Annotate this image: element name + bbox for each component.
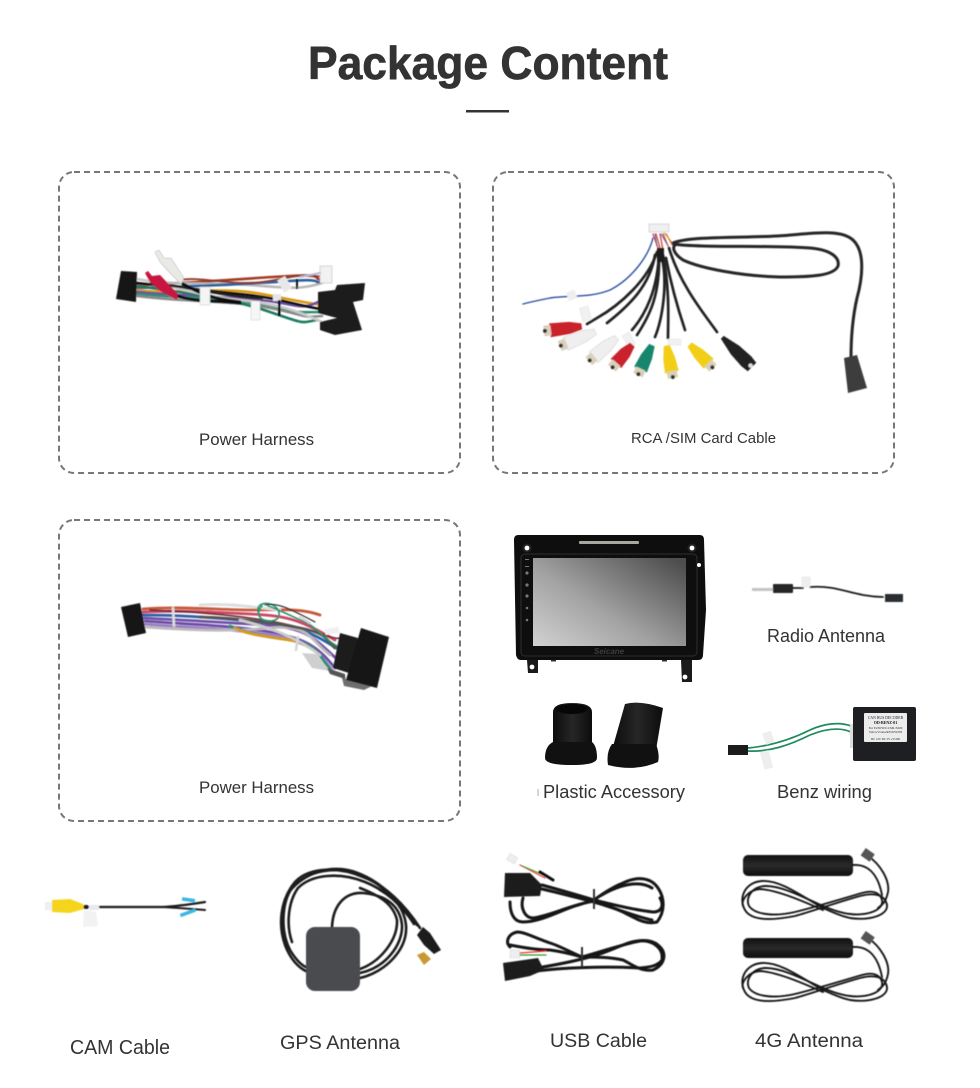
radio antenna: [752, 577, 903, 646]
Benz wiring: Volvo/Vcano/R350/W203: [869, 730, 903, 734]
blue wire: [523, 238, 653, 304]
image: power harness: [121, 603, 389, 690]
green RCA plug: [631, 342, 658, 379]
wire labels: [579, 306, 592, 322]
GPS antenna: [280, 869, 441, 1054]
small mark beside Plastic Accessory: [538, 789, 539, 796]
title underline: [466, 110, 509, 112]
right connector: [333, 633, 358, 674]
puck: [306, 927, 360, 991]
white RCA plug 2: [584, 332, 621, 367]
lower antenna: [742, 931, 888, 1001]
caption: USB Cable: [550, 1031, 647, 1052]
green loop: [258, 604, 337, 646]
right sleeve: [612, 703, 663, 750]
image: camera cable: [45, 897, 205, 927]
head unit: [514, 535, 706, 682]
white connector: [649, 224, 669, 232]
left connector: [121, 603, 146, 637]
bottom cable: [508, 932, 664, 971]
caption: Benz wiring: [777, 782, 872, 802]
panel: power harness 1: [59, 172, 460, 473]
white RCA plug: [556, 325, 598, 353]
image: antenna cable: [752, 577, 903, 602]
image: power harness with RCA plugs: [116, 250, 365, 335]
image: GPS puck and cable: [281, 869, 441, 991]
image: USB cables: [503, 853, 664, 981]
cable ties: [173, 608, 174, 626]
SIM plug: [844, 355, 867, 393]
upper antenna: [742, 848, 888, 919]
white RCA plug: [155, 250, 184, 284]
caption: CAM Cable: [70, 1037, 170, 1059]
red RCA plug: [542, 319, 583, 338]
panel: power harness 2: [59, 520, 460, 821]
small white connector: [320, 266, 332, 283]
Benz wiring: For E230/W211/ML/S200: [869, 726, 903, 730]
chrome strip: [579, 541, 639, 544]
black audio jack: [717, 332, 757, 372]
title: Package Content: [308, 37, 668, 89]
Benz wiring: OD-BENZ-01: [874, 720, 897, 725]
caption: Power Harness: [199, 778, 314, 797]
CAM cable: [45, 897, 205, 1059]
left connector: [116, 271, 137, 302]
caption: GPS Antenna: [280, 1033, 400, 1054]
Benz wiring: CAN BUS DECODER: [868, 716, 904, 720]
yellow RCA plug: [660, 344, 680, 380]
caption: RCA /SIM Card Cable: [631, 430, 776, 447]
right connector: [318, 283, 365, 335]
caption: Radio Antenna: [767, 626, 886, 646]
left sleeve: [553, 703, 592, 745]
side buttons: [525, 559, 529, 621]
red RCA plug: [145, 271, 178, 300]
top cable: [510, 879, 663, 923]
connector: [417, 927, 441, 954]
Benz wiring: [728, 707, 916, 802]
Benz wiring: DC 12V DC 5V 215160: [871, 737, 901, 741]
caption: Power Harness: [199, 430, 314, 449]
yellow RCA plug 2: [685, 340, 719, 374]
red RCA plug 2: [606, 340, 638, 373]
caption: 4G Antenna: [755, 1031, 863, 1052]
wire labels: [200, 287, 210, 305]
caption: Plastic Accessory: [543, 782, 685, 802]
breakout wires: [587, 248, 717, 338]
panel: RCA / SIM card cable: [493, 172, 894, 473]
SIM cable: [673, 233, 862, 358]
brand: Seicane: [594, 647, 625, 656]
4G antenna: [742, 848, 888, 1052]
image: RCA and SIM cable: [523, 224, 867, 393]
screen: [533, 558, 686, 646]
plastic accessory: [543, 703, 685, 802]
USB cable: [503, 853, 664, 1052]
